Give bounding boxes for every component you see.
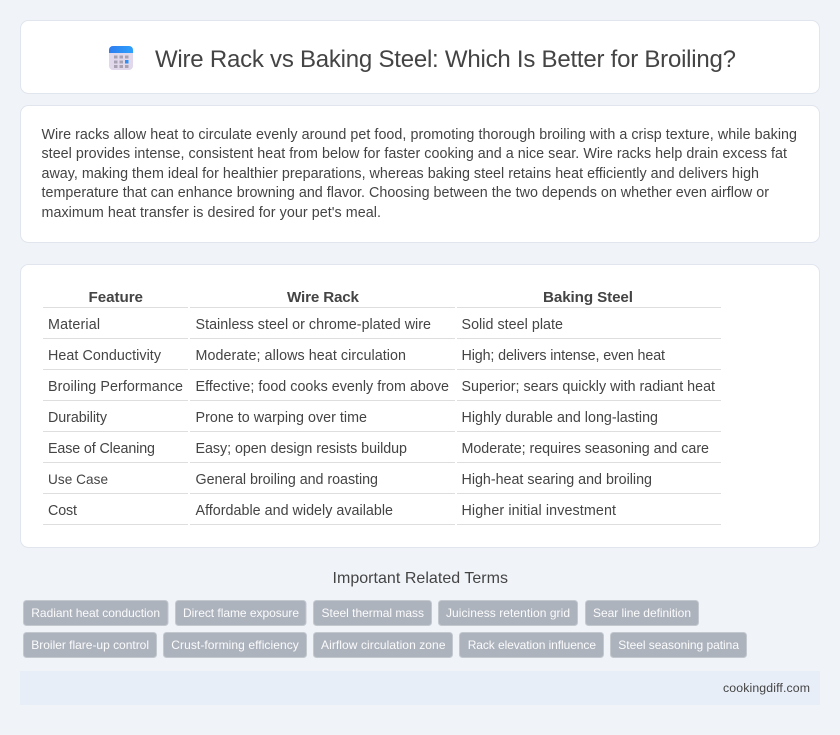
- chip: [176, 600, 306, 626]
- row: use case: Use Case: [48, 472, 108, 487]
- icon: calendar: [109, 46, 133, 70]
- row: heat conductivity: High; delivers intense, even heat: [462, 348, 665, 364]
- chip: Steel seasoning patina: [618, 638, 739, 652]
- chip: Steel thermal mass: [322, 606, 424, 620]
- related term chips: [24, 600, 746, 658]
- row: cost: Affordable and widely available: [196, 503, 393, 519]
- row: heat conductivity: Heat Conductivity: [48, 348, 162, 364]
- row: broiling performance: Superior; sears quickly with radiant heat: [462, 379, 715, 395]
- row: broiling performance: Effective; food cooks evenly from above: [196, 379, 449, 395]
- chip: Sear line definition: [593, 606, 691, 620]
- row: durability: Prone to warping over time: [196, 410, 367, 426]
- row: durability: Durability: [48, 410, 108, 426]
- row: use case: [48, 472, 652, 488]
- footer: [20, 671, 820, 705]
- panel: intro text: [20, 106, 820, 242]
- table header row: [88, 289, 633, 306]
- footer: cookingdiff.com: [723, 681, 810, 695]
- row: broiling performance: [48, 379, 715, 395]
- row: cost: [48, 503, 616, 519]
- table header row: Feature: [88, 289, 143, 306]
- row: material: Solid steel plate: [462, 317, 563, 333]
- table header row: Wire Rack: [287, 289, 360, 306]
- row: use case: General broiling and roasting: [196, 472, 378, 488]
- header panel: [20, 20, 820, 94]
- row: heat conductivity: Moderate; allows heat circulation: [196, 348, 406, 364]
- panel: comparison table: [20, 264, 820, 548]
- chip: Airflow circulation zone: [321, 638, 446, 652]
- chip: Broiler flare-up control: [31, 638, 149, 652]
- panel: intro text: steel provides intense, consistent heat from below for faster cooking and a nice sear. Wire racks help drain excess fat: [42, 146, 787, 162]
- panel: intro text: temperature that can enhance browning and flavor. Choosing between the two depends on whether even airflow or: [42, 185, 769, 201]
- chip: [460, 632, 604, 658]
- row: cost: Cost: [48, 503, 77, 519]
- row: material: Stainless steel or chrome-plated wire: [196, 317, 431, 333]
- row: ease of cleaning: [48, 441, 709, 457]
- chip: [610, 632, 746, 658]
- row: broiling performance: Broiling Performance: [48, 379, 183, 395]
- chip: [24, 600, 168, 626]
- chip: [164, 632, 306, 658]
- chip: [314, 632, 452, 658]
- chip: Crust-forming efficiency: [171, 638, 299, 652]
- chip: [24, 632, 156, 658]
- chip: Direct flame exposure: [183, 606, 299, 620]
- chip: [438, 600, 578, 626]
- row: durability: [48, 410, 658, 426]
- row: material: [48, 317, 563, 333]
- row: ease of cleaning: Easy; open design resists buildup: [196, 441, 407, 457]
- panel: intro text: away, making them ideal for healthier preparations, whereas baking steel retains heat efficiently and delivers high: [42, 166, 759, 182]
- row: heat conductivity: [48, 348, 665, 364]
- chip: Rack elevation influence: [468, 638, 596, 652]
- table header row: Baking Steel: [543, 289, 633, 306]
- panel: intro text: Wire racks allow heat to circulate evenly around pet food, promoting thorough broiling with a crisp texture, while baking: [42, 127, 797, 143]
- chip: [314, 600, 432, 626]
- row: ease of cleaning: Moderate; requires seasoning and care: [462, 441, 709, 457]
- chip: [586, 600, 698, 626]
- heading: related terms: Important Related Terms: [332, 570, 508, 587]
- row: cost: Higher initial investment: [462, 503, 616, 519]
- row: use case: High-heat searing and broiling: [462, 472, 652, 488]
- title: Wire Rack vs Baking Steel: Which Is Better for Broiling?: [155, 46, 736, 73]
- row: durability: Highly durable and long-lasting: [462, 410, 658, 426]
- chip: Radiant heat conduction: [31, 606, 160, 620]
- panel: intro text: maximum heat transfer is desired for your pet's meal.: [42, 205, 381, 221]
- row: ease of cleaning: Ease of Cleaning: [48, 441, 155, 457]
- chip: Juiciness retention grid: [446, 606, 570, 620]
- row: material: Material: [48, 317, 100, 333]
